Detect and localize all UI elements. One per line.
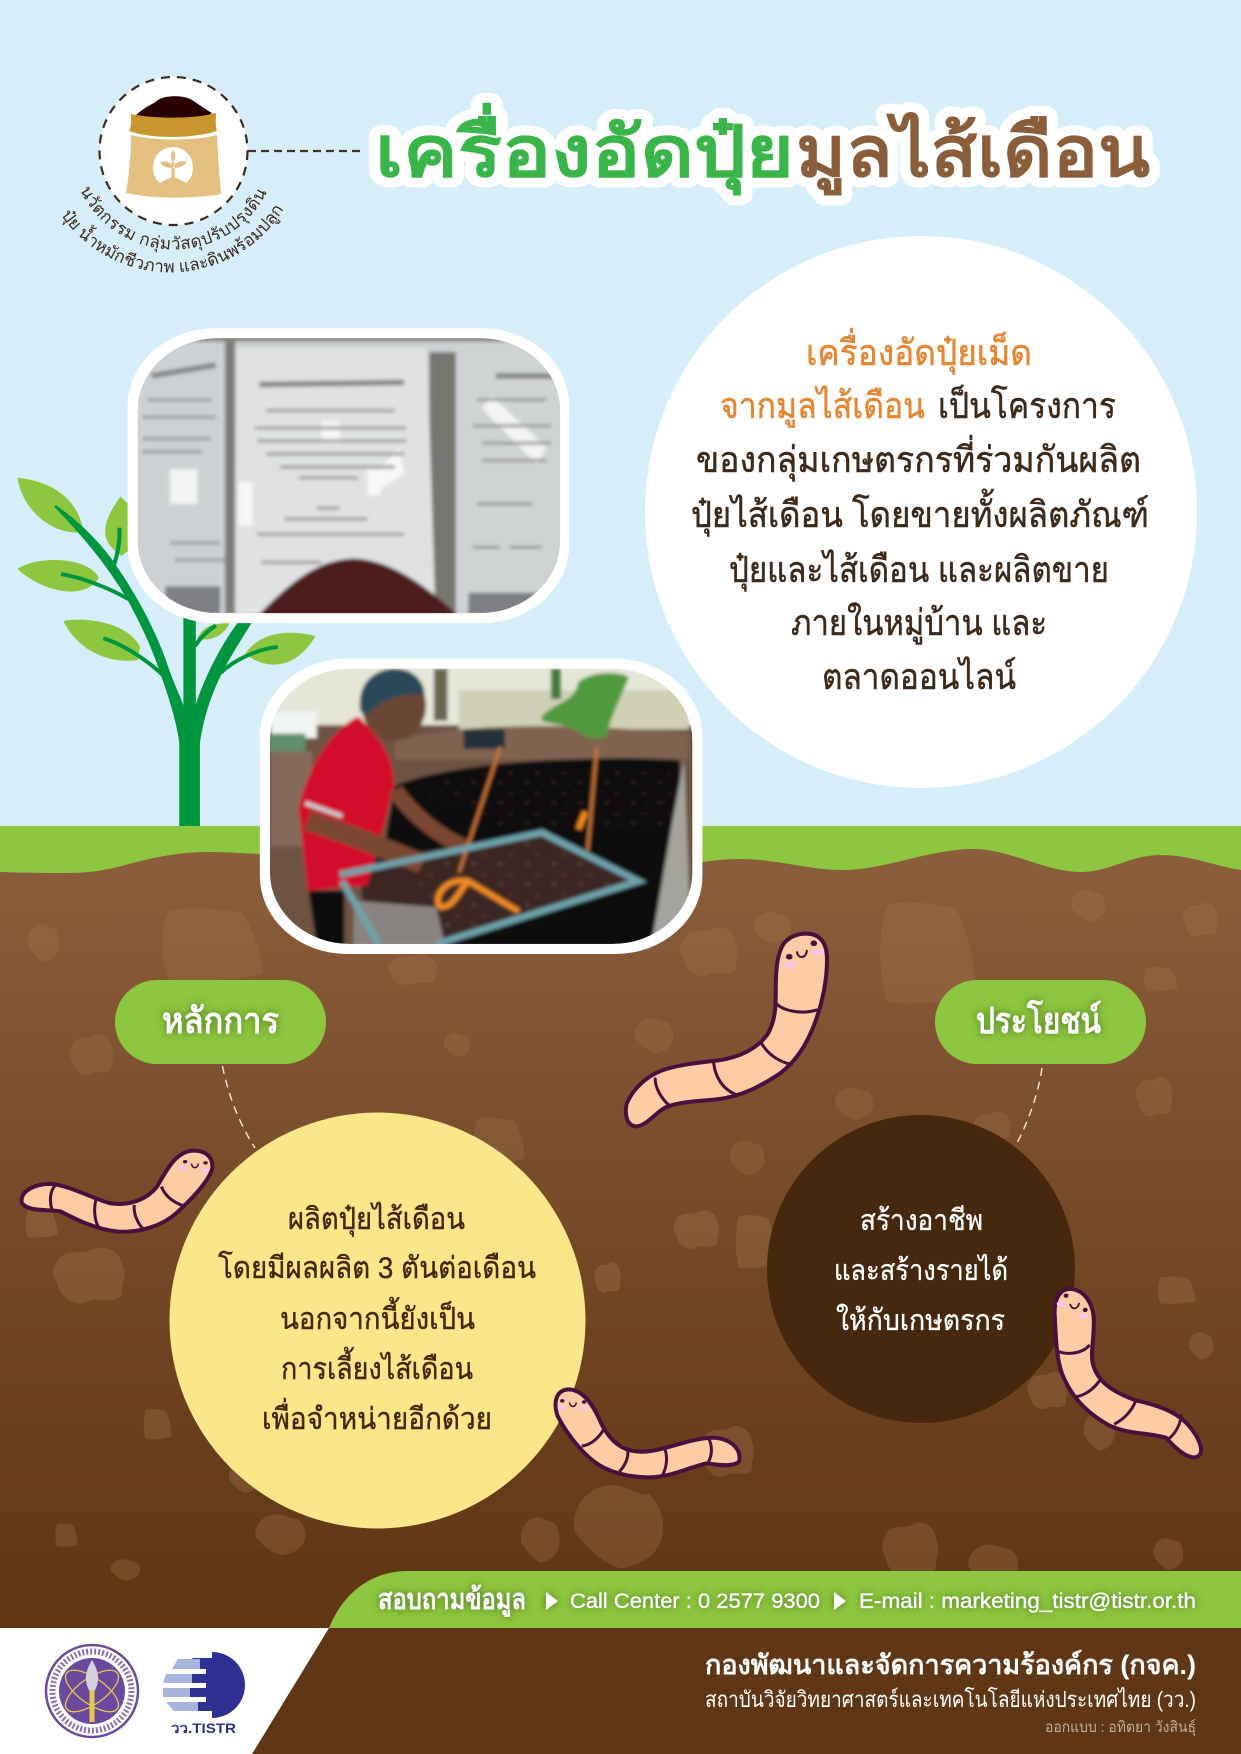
worm: lower middle	[556, 1389, 740, 1477]
title: เครื่องอัดปุ๋ย	[375, 102, 794, 196]
dark circle: benefits text	[767, 1115, 1075, 1423]
intro circle	[645, 236, 1197, 788]
footer: organisation text	[705, 1649, 1196, 1737]
title: มูลไส้เดือน	[796, 111, 1150, 196]
dark circle: benefits text: สร้างอาชีพ	[860, 1205, 983, 1237]
pill: principle heading	[115, 980, 326, 1064]
yellow circle: principle text: เพื่อจำหน่ายอีกด้วย	[262, 1398, 492, 1436]
footer: contact bar	[329, 1571, 1241, 1628]
connector: principle	[222, 1066, 255, 1148]
intro circle: เครื่องอัดปุ๋ยเม็ด	[806, 328, 1032, 375]
intro circle: จากมูลไส้เดือน	[720, 385, 925, 428]
intro circle: ตลาดออนไลน์	[822, 656, 1016, 697]
yellow circle: principle text: นอกจากนี้ยังเป็น	[280, 1297, 475, 1336]
footer: contact bar: Call Center : 0 2577 9300	[570, 1590, 820, 1613]
curved badge caption: นวัตกรรม กลุ่มวัสดุปรับปรุงดิน	[81, 186, 266, 253]
footer: white logo panel	[0, 1628, 329, 1754]
worm: left	[22, 1151, 212, 1232]
title: เครื่องอัดปุ๋ย	[375, 102, 794, 196]
title badge: fertilizer sack icon	[100, 77, 248, 225]
yellow circle: principle text: การเลี้ยงไส้เดือน	[281, 1347, 473, 1386]
footer: organisation text: กองพัฒนาและจัดการความร้องค์กร (กจค.)	[705, 1649, 1196, 1680]
footer: contact bar: E-mail : marketing_tistr@tistr.or.th	[859, 1590, 1196, 1613]
connector: benefits	[1016, 1068, 1042, 1145]
worm: large upper	[626, 934, 827, 1126]
intro circle: ของกลุ่มเกษตรกรที่ร่วมกันผลิต	[696, 435, 1141, 482]
worm: right	[1055, 1289, 1201, 1457]
intro circle: ปุ๋ยและไส้เดือน และผลิตขาย	[729, 549, 1109, 592]
pill: benefits heading: ประโยชน์	[976, 999, 1101, 1041]
footer: contact bar: สอบถามข้อมูล	[378, 1584, 526, 1617]
yellow circle: principle text	[170, 1112, 586, 1528]
logo: TISTR: วว.TISTR	[171, 1720, 236, 1736]
ground: soil	[0, 849, 1241, 1640]
logo: TISTR	[160, 1650, 245, 1736]
plant	[17, 478, 315, 826]
dark circle: benefits text: และสร้างรายได้	[834, 1253, 1008, 1287]
intro circle: เป็นโครงการ	[938, 383, 1116, 426]
pill: principle heading: หลักการ	[162, 1000, 280, 1041]
badge connector	[248, 150, 364, 152]
logo: ministry seal	[46, 1645, 138, 1737]
intro circle: ปุ๋ยไส้เดือน โดยขายทั้งผลิตภัณฑ์	[691, 488, 1149, 537]
footer: organisation text: ออกแบบ : อทิตยา วังสินธุ์	[1045, 1719, 1196, 1737]
photo: fertilizer bags	[128, 328, 569, 623]
pill: benefits heading	[935, 980, 1146, 1064]
soil pebbles: upper	[28, 890, 1218, 1175]
photo: farmer at worm bed	[260, 659, 702, 954]
ground: grass strip	[0, 826, 1241, 886]
curved badge caption: ปุ๋ย น้ำหมักชีวภาพ และดินพร้อมปลูก	[62, 206, 284, 272]
footer: dark band	[0, 1628, 1241, 1754]
title	[375, 102, 1150, 196]
dark circle: benefits text: ให้กับเกษตรกร	[836, 1303, 1005, 1337]
yellow circle: principle text: ผลิตปุ๋ยไส้เดือน	[288, 1201, 465, 1238]
sky background	[0, 0, 1241, 900]
soil pebbles: lower	[26, 1209, 1214, 1585]
intro circle: ภายในหมู่บ้าน และ	[791, 602, 1047, 645]
yellow circle: principle text: โดยมีผลผลิต 3 ตันต่อเดือน	[218, 1250, 536, 1285]
